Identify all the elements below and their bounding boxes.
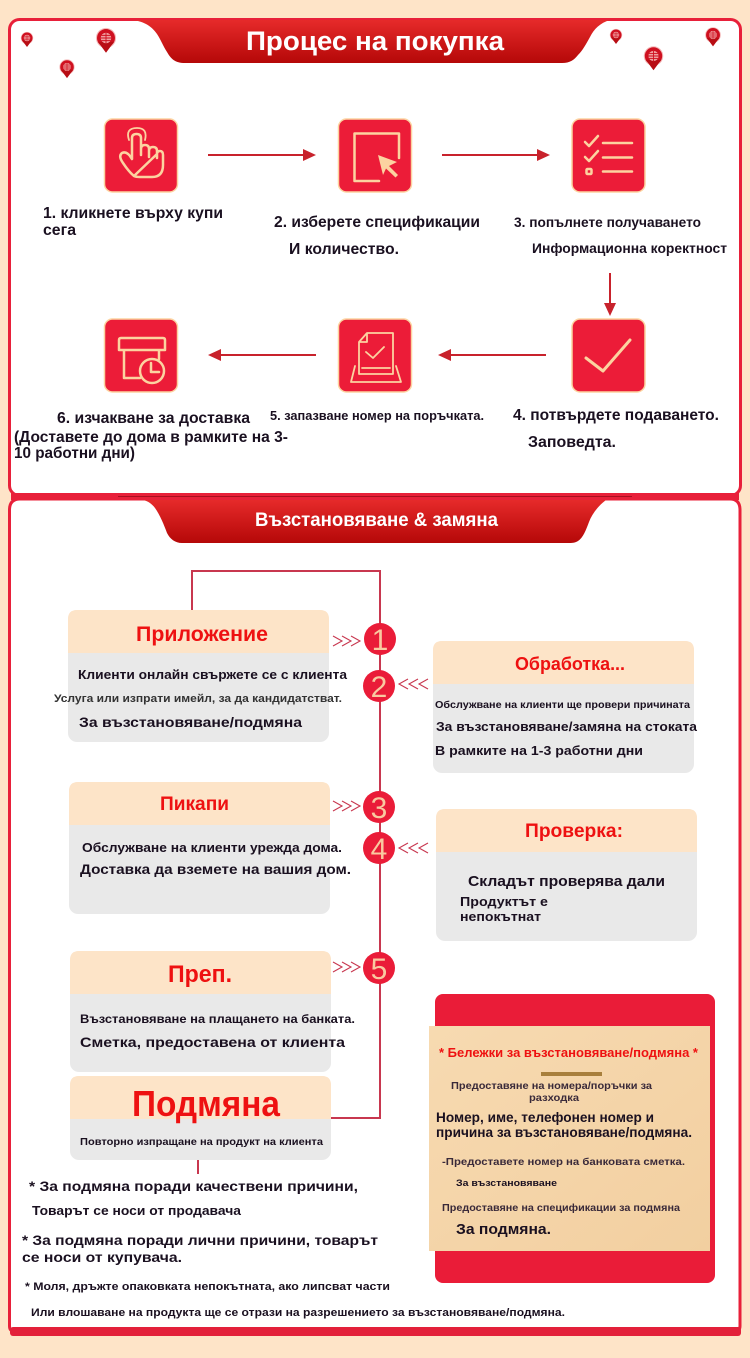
decorative map pins bbox=[21, 27, 721, 78]
footnotes: * Моля, дръжте опаковката непокътната, ако липсват части bbox=[25, 1281, 390, 1293]
step 2 label: И количество. bbox=[289, 241, 399, 258]
panel: refund and exchange bbox=[10, 493, 741, 1336]
panel: refund notes: причина за възстановяване/подмяна. bbox=[436, 1124, 692, 1140]
card: inspection: Проверка: bbox=[525, 821, 623, 842]
step marker 2: 2 bbox=[371, 671, 387, 704]
panel: refund notes: -Предоставете номер на банковата сметка. bbox=[442, 1156, 685, 1168]
card: refund: Възстановяване на плащането на банката. bbox=[80, 1012, 355, 1026]
card: exchange bbox=[70, 1076, 331, 1160]
footnotes: Товарът се носи от продавача bbox=[32, 1203, 242, 1218]
step 1 label: сега bbox=[43, 222, 76, 239]
step marker 3: 3 bbox=[371, 792, 387, 825]
heading banner: purchase process bbox=[132, 20, 610, 63]
icon: delivery box with clock bbox=[104, 319, 178, 392]
card: refund: Преп. bbox=[168, 961, 232, 988]
card: pickup bbox=[69, 782, 351, 914]
step 2 label: 2. изберете спецификации bbox=[274, 214, 480, 231]
card: application: За възстановяване/подмяна bbox=[79, 714, 302, 730]
panel: refund notes: Номер, име, телефонен номер и bbox=[436, 1109, 654, 1125]
card: exchange: Повторно изпращане на продукт на клиента bbox=[80, 1137, 323, 1148]
step 3 label: Информационна коректност bbox=[532, 241, 727, 256]
step 6 label: 6. изчакване за доставка bbox=[57, 410, 250, 427]
card: refund bbox=[70, 951, 355, 1072]
arrow: step 5 to 6 bbox=[208, 349, 316, 361]
card: pickup: Доставка да вземете на вашия дом. bbox=[80, 861, 351, 877]
panel: refund notes: Предоставяне на номера/поръчки за bbox=[451, 1081, 652, 1092]
step 6 label: (Доставете до дома в рамките на 3- bbox=[14, 429, 288, 446]
step marker 5 bbox=[363, 952, 395, 986]
chevrons: card 1 to marker 1 bbox=[333, 636, 360, 646]
panel: refund notes: * Бележки за възстановяване/подмяна * bbox=[439, 1046, 698, 1060]
panel: refund notes: За подмяна. bbox=[456, 1221, 551, 1238]
footnotes: се носи от купувача. bbox=[22, 1249, 182, 1265]
card: processing: За възстановяване/замяна на стоката bbox=[436, 719, 698, 734]
card: inspection bbox=[436, 809, 697, 941]
footnotes: Или влошаване на продукта ще се отрази на разрешението за възстановяване/подмяна. bbox=[31, 1307, 565, 1319]
card: inspection: Продуктът е bbox=[460, 894, 548, 909]
step 1 label: 1. кликнете върху купи bbox=[43, 205, 223, 222]
step 5 label: 5. запазване номер на поръчката. bbox=[270, 409, 484, 423]
icon: select cursor bbox=[338, 119, 412, 192]
step 4 label bbox=[513, 407, 719, 451]
chevrons: marker 4 to inspection bbox=[399, 843, 428, 853]
card: application: Приложение bbox=[136, 623, 268, 646]
chevrons: card 2 to marker 3 bbox=[333, 801, 360, 811]
card: application: Услуга или изпрати имейл, за да кандидатстват. bbox=[54, 693, 342, 705]
card: inspection: Складът проверява дали bbox=[468, 873, 665, 890]
card: inspection: непокътнат bbox=[460, 909, 541, 924]
card: pickup: Пикапи bbox=[160, 794, 229, 815]
card: application: Клиенти онлайн свържете се с клиента bbox=[78, 667, 348, 682]
card: processing bbox=[433, 641, 698, 773]
step marker 5: 5 bbox=[371, 953, 387, 986]
card: pickup: Обслужване на клиенти урежда дома. bbox=[82, 840, 342, 855]
step marker 3 bbox=[363, 791, 395, 825]
card: processing: Обслужване на клиенти ще провери причината bbox=[435, 699, 690, 711]
panel: purchase process bbox=[10, 20, 740, 496]
step marker 4: 4 bbox=[371, 833, 387, 866]
heading banner: purchase process: Процес на покупка bbox=[246, 26, 505, 56]
card: processing: В рамките на 1-3 работни дни bbox=[435, 743, 643, 758]
heading banner: refund and exchange: Възстановяване & замяна bbox=[255, 510, 498, 531]
icon: checklist bbox=[572, 119, 645, 192]
card: application bbox=[54, 610, 348, 742]
footnotes: * За подмяна поради лични причини, товарът bbox=[22, 1232, 378, 1248]
arrow: step 1 to 2 bbox=[208, 149, 316, 161]
arrow: step 3 to 4 bbox=[604, 273, 616, 316]
chevrons: marker 2 to processing bbox=[399, 679, 428, 689]
panel: refund notes: За възстановяване bbox=[456, 1178, 557, 1189]
icon: confirm check bbox=[572, 319, 645, 392]
step marker 2 bbox=[363, 670, 395, 704]
flow connector line bbox=[192, 571, 380, 1174]
step marker 1: 1 bbox=[372, 624, 388, 657]
card: exchange: Подмяна bbox=[132, 1083, 281, 1124]
step marker 4 bbox=[363, 832, 395, 866]
step 6 label bbox=[14, 410, 288, 462]
icon: hand tap bbox=[104, 119, 178, 192]
icon: order document bbox=[338, 319, 412, 392]
step 4 label: 4. потвърдете подаването. bbox=[513, 407, 719, 424]
panel: refund notes: разходка bbox=[529, 1093, 579, 1104]
step 6 label: 10 работни дни) bbox=[14, 445, 135, 462]
step 4 label: Заповедта. bbox=[528, 434, 616, 451]
step 1 label bbox=[43, 205, 223, 239]
card: processing: Обработка... bbox=[515, 654, 625, 674]
step 2 label bbox=[274, 214, 480, 258]
step 3 label: 3. попълнете получаването bbox=[514, 215, 701, 230]
step 3 label bbox=[514, 215, 727, 256]
footnotes bbox=[22, 1178, 565, 1319]
panel: refund notes bbox=[429, 994, 715, 1283]
step marker 1 bbox=[364, 623, 396, 657]
card: refund: Сметка, предоставена от клиента bbox=[80, 1034, 345, 1050]
heading banner: refund and exchange bbox=[143, 500, 606, 543]
arrow: step 4 to 5 bbox=[438, 349, 546, 361]
footnotes: * За подмяна поради качествени причини, bbox=[29, 1178, 358, 1194]
panel: refund notes: Предоставяне на спецификации за подмяна bbox=[442, 1202, 680, 1214]
chevrons: card 3 to marker 5 bbox=[333, 962, 360, 972]
arrow: step 2 to 3 bbox=[442, 149, 550, 161]
